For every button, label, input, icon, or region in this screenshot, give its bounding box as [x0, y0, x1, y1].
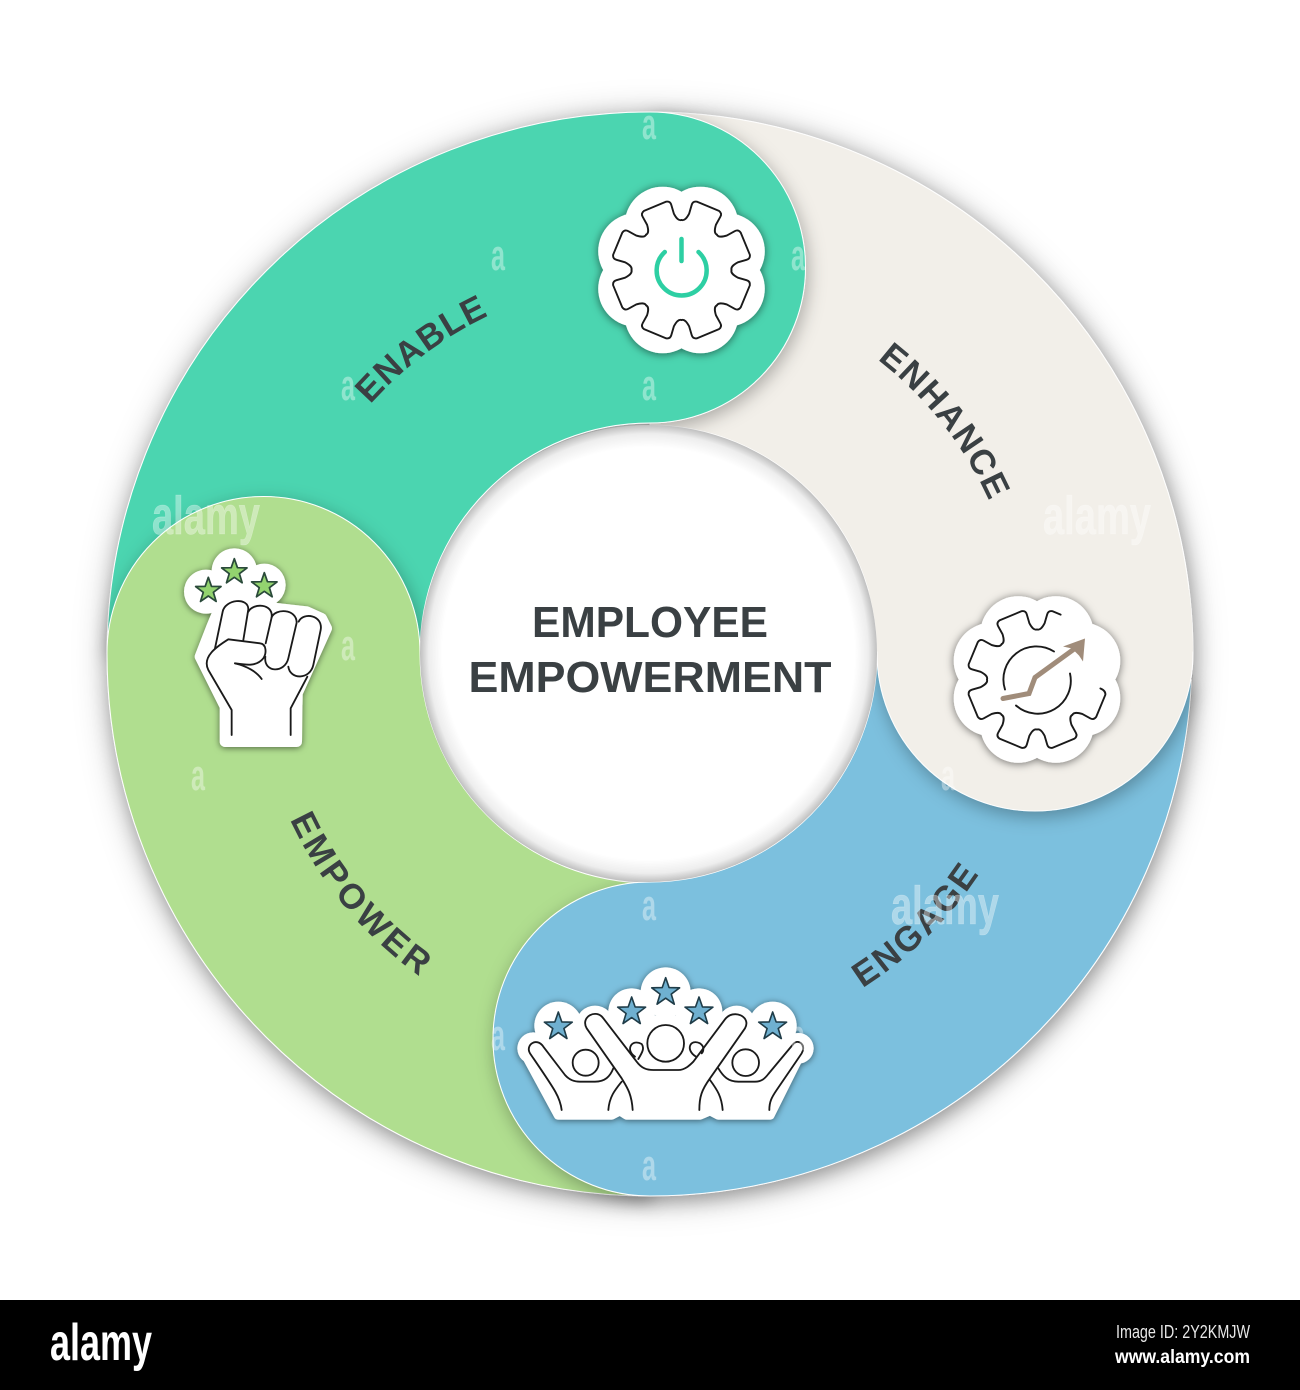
icon: raised fist with stars	[184, 548, 327, 742]
watermarks: a	[341, 621, 355, 670]
watermarks: a	[642, 100, 656, 149]
center title: EMPOWERMENT	[468, 653, 832, 702]
label: engage: ENGAGE	[850, 862, 978, 987]
watermarks: a	[491, 1011, 505, 1060]
footer bar: alamy	[50, 1314, 152, 1372]
watermarks: alamy	[891, 876, 999, 936]
watermarks: a	[642, 881, 656, 930]
icon: gear with growth arrow	[954, 596, 1120, 763]
watermarks: a	[191, 751, 205, 800]
watermarks: a	[491, 231, 505, 280]
footer bar: www.alamy.com	[1114, 1347, 1250, 1368]
panel: engage	[493, 653, 1192, 1196]
watermarks: a	[341, 361, 355, 410]
watermarks: a	[791, 1011, 805, 1060]
label: empower: EMPOWER	[290, 810, 430, 976]
center title: EMPLOYEE	[532, 598, 768, 647]
watermarks: alamy	[152, 486, 260, 546]
icon: cheering team with stars	[517, 967, 814, 1115]
watermarks: a	[642, 361, 656, 410]
watermarks: a	[642, 1141, 656, 1190]
label: enable: ENABLE	[354, 295, 488, 403]
panel: empower	[107, 496, 650, 1196]
watermarks	[152, 100, 1151, 1190]
footer bar	[0, 1300, 1300, 1390]
center circle	[420, 425, 877, 882]
watermarks: a	[941, 751, 955, 800]
outer soft shadow	[102, 110, 1198, 1206]
panel: enhance cap overlapping engage	[868, 590, 1193, 826]
label: enhance: ENHANCE	[879, 342, 1010, 500]
watermarks: alamy	[1043, 486, 1151, 546]
panel: enable	[107, 112, 806, 653]
center title	[468, 598, 832, 702]
icon: gear with power symbol	[598, 187, 765, 353]
panel: enhance	[650, 112, 1193, 811]
watermarks: a	[791, 231, 805, 280]
footer bar: Image ID: 2Y2KMJW	[1116, 1322, 1250, 1342]
